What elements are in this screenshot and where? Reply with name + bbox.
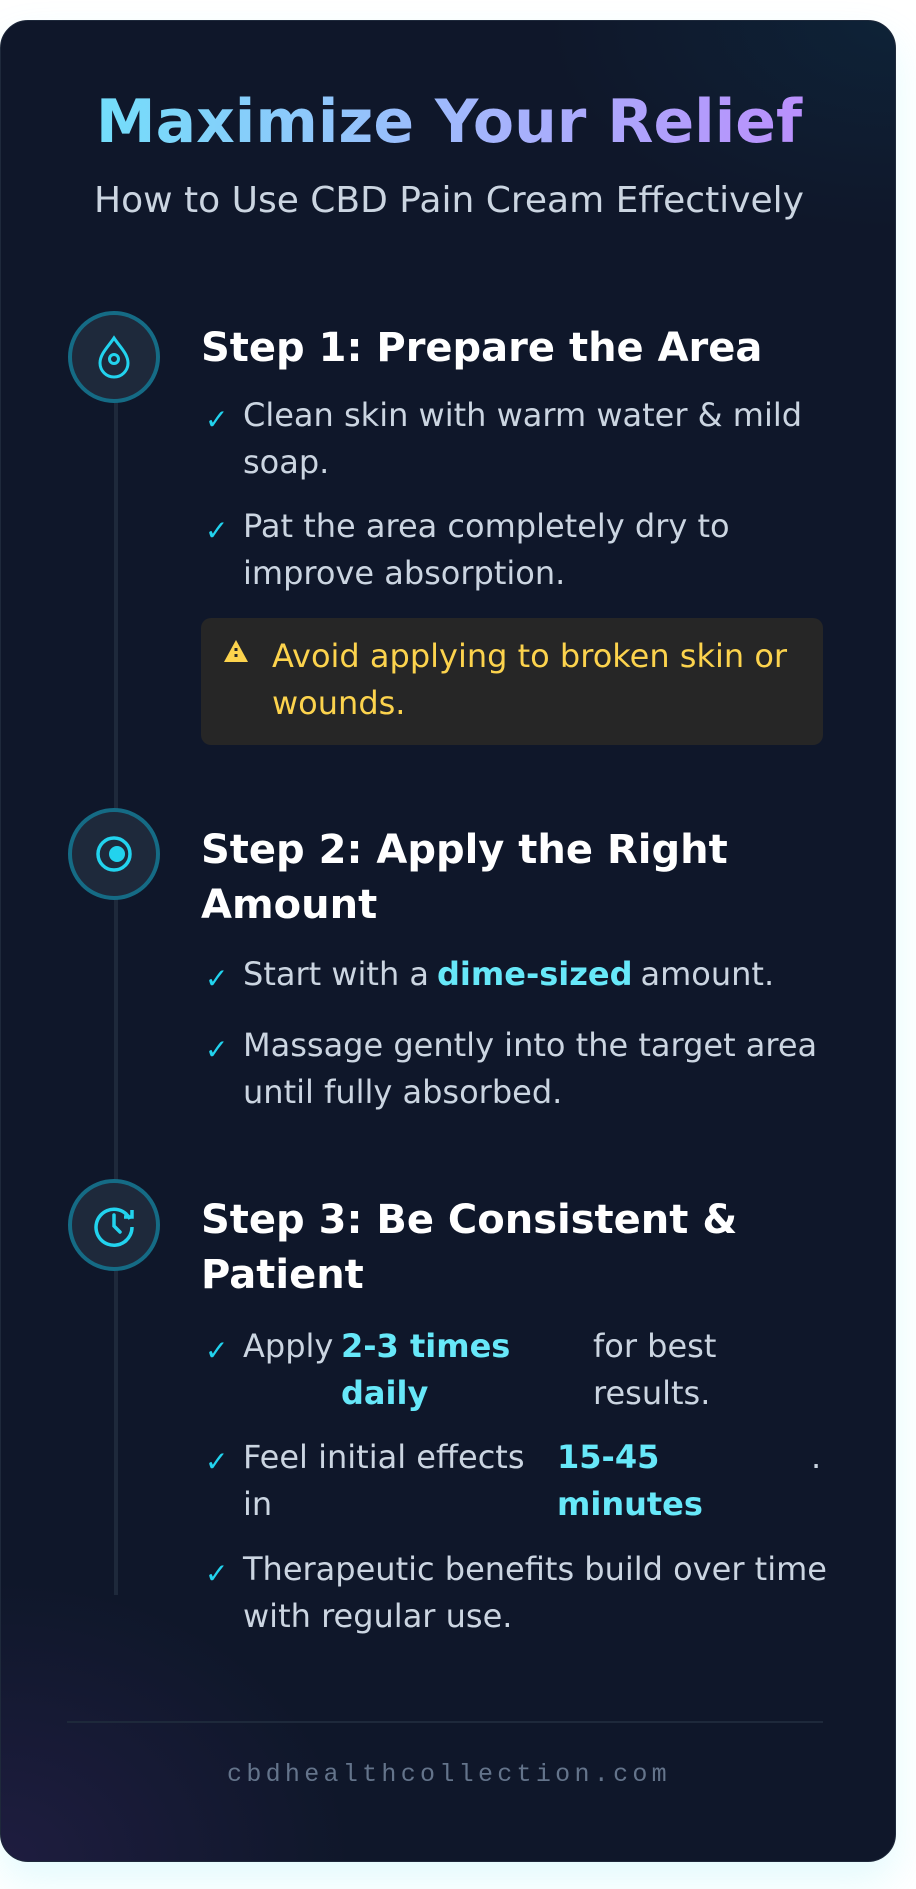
step 3 bullet 2: Feel initial effects in bbox=[243, 1438, 524, 1523]
step 2 bullet 1: Start with a bbox=[243, 955, 429, 993]
step 2 bullet 1 bbox=[205, 955, 774, 995]
step 3 bullet 1: for best results. bbox=[593, 1327, 716, 1412]
warning text: Avoid applying to broken skin or wounds. bbox=[272, 637, 787, 722]
icon: clock bbox=[68, 1179, 160, 1271]
icon: droplet bbox=[68, 311, 160, 403]
step 2 bullet 1: amount. bbox=[640, 955, 774, 993]
step 1 bullet 1: Clean skin with warm water & mild soap. bbox=[243, 396, 802, 481]
icon: target bbox=[68, 808, 160, 900]
step 1 bullet 2: Pat the area completely dry to improve absorption. bbox=[243, 507, 730, 592]
step 2 bullet 2: Massage gently into the target area until fully absorbed. bbox=[243, 1026, 817, 1111]
step 3 bullet 2: . bbox=[811, 1438, 821, 1476]
step 1 bullet 1: ✓ bbox=[205, 403, 228, 436]
step 3 bullet 1: ✓ bbox=[205, 1334, 228, 1367]
title: Maximize Your Relief bbox=[96, 87, 802, 157]
step 1 bullet 2: ✓ bbox=[205, 514, 228, 547]
warning callout bbox=[201, 618, 823, 745]
step 3 bullet 2: 15-45 minutes bbox=[557, 1438, 703, 1523]
step 2 bullet 2: ✓ bbox=[205, 1033, 228, 1066]
step 2 heading: Step 2: Apply the Right Amount bbox=[201, 827, 728, 928]
footer url: cbdhealthcollection.com bbox=[227, 1760, 671, 1789]
step 2 bullet 1: dime-sized bbox=[437, 955, 632, 993]
timeline line bbox=[114, 357, 118, 1595]
step 2 bullet 1: ✓ bbox=[205, 962, 228, 995]
step 3 bullet 1: Apply bbox=[243, 1327, 333, 1365]
step 3 bullet 3: Therapeutic benefits build over time with regular use. bbox=[243, 1550, 827, 1635]
step 3 bullet 1 bbox=[205, 1327, 716, 1412]
subtitle: How to Use CBD Pain Cream Effectively bbox=[94, 180, 804, 221]
step 3 bullet 2: ✓ bbox=[205, 1445, 228, 1478]
step 3 bullet 1: 2-3 times daily bbox=[341, 1327, 510, 1412]
step 1 heading: Step 1: Prepare the Area bbox=[201, 325, 762, 371]
step 3 bullet 2 bbox=[205, 1438, 821, 1523]
step 3 bullet 3: ✓ bbox=[205, 1557, 228, 1590]
step 3 heading: Step 3: Be Consistent & Patient bbox=[201, 1197, 737, 1298]
icon: warning bbox=[224, 640, 248, 662]
